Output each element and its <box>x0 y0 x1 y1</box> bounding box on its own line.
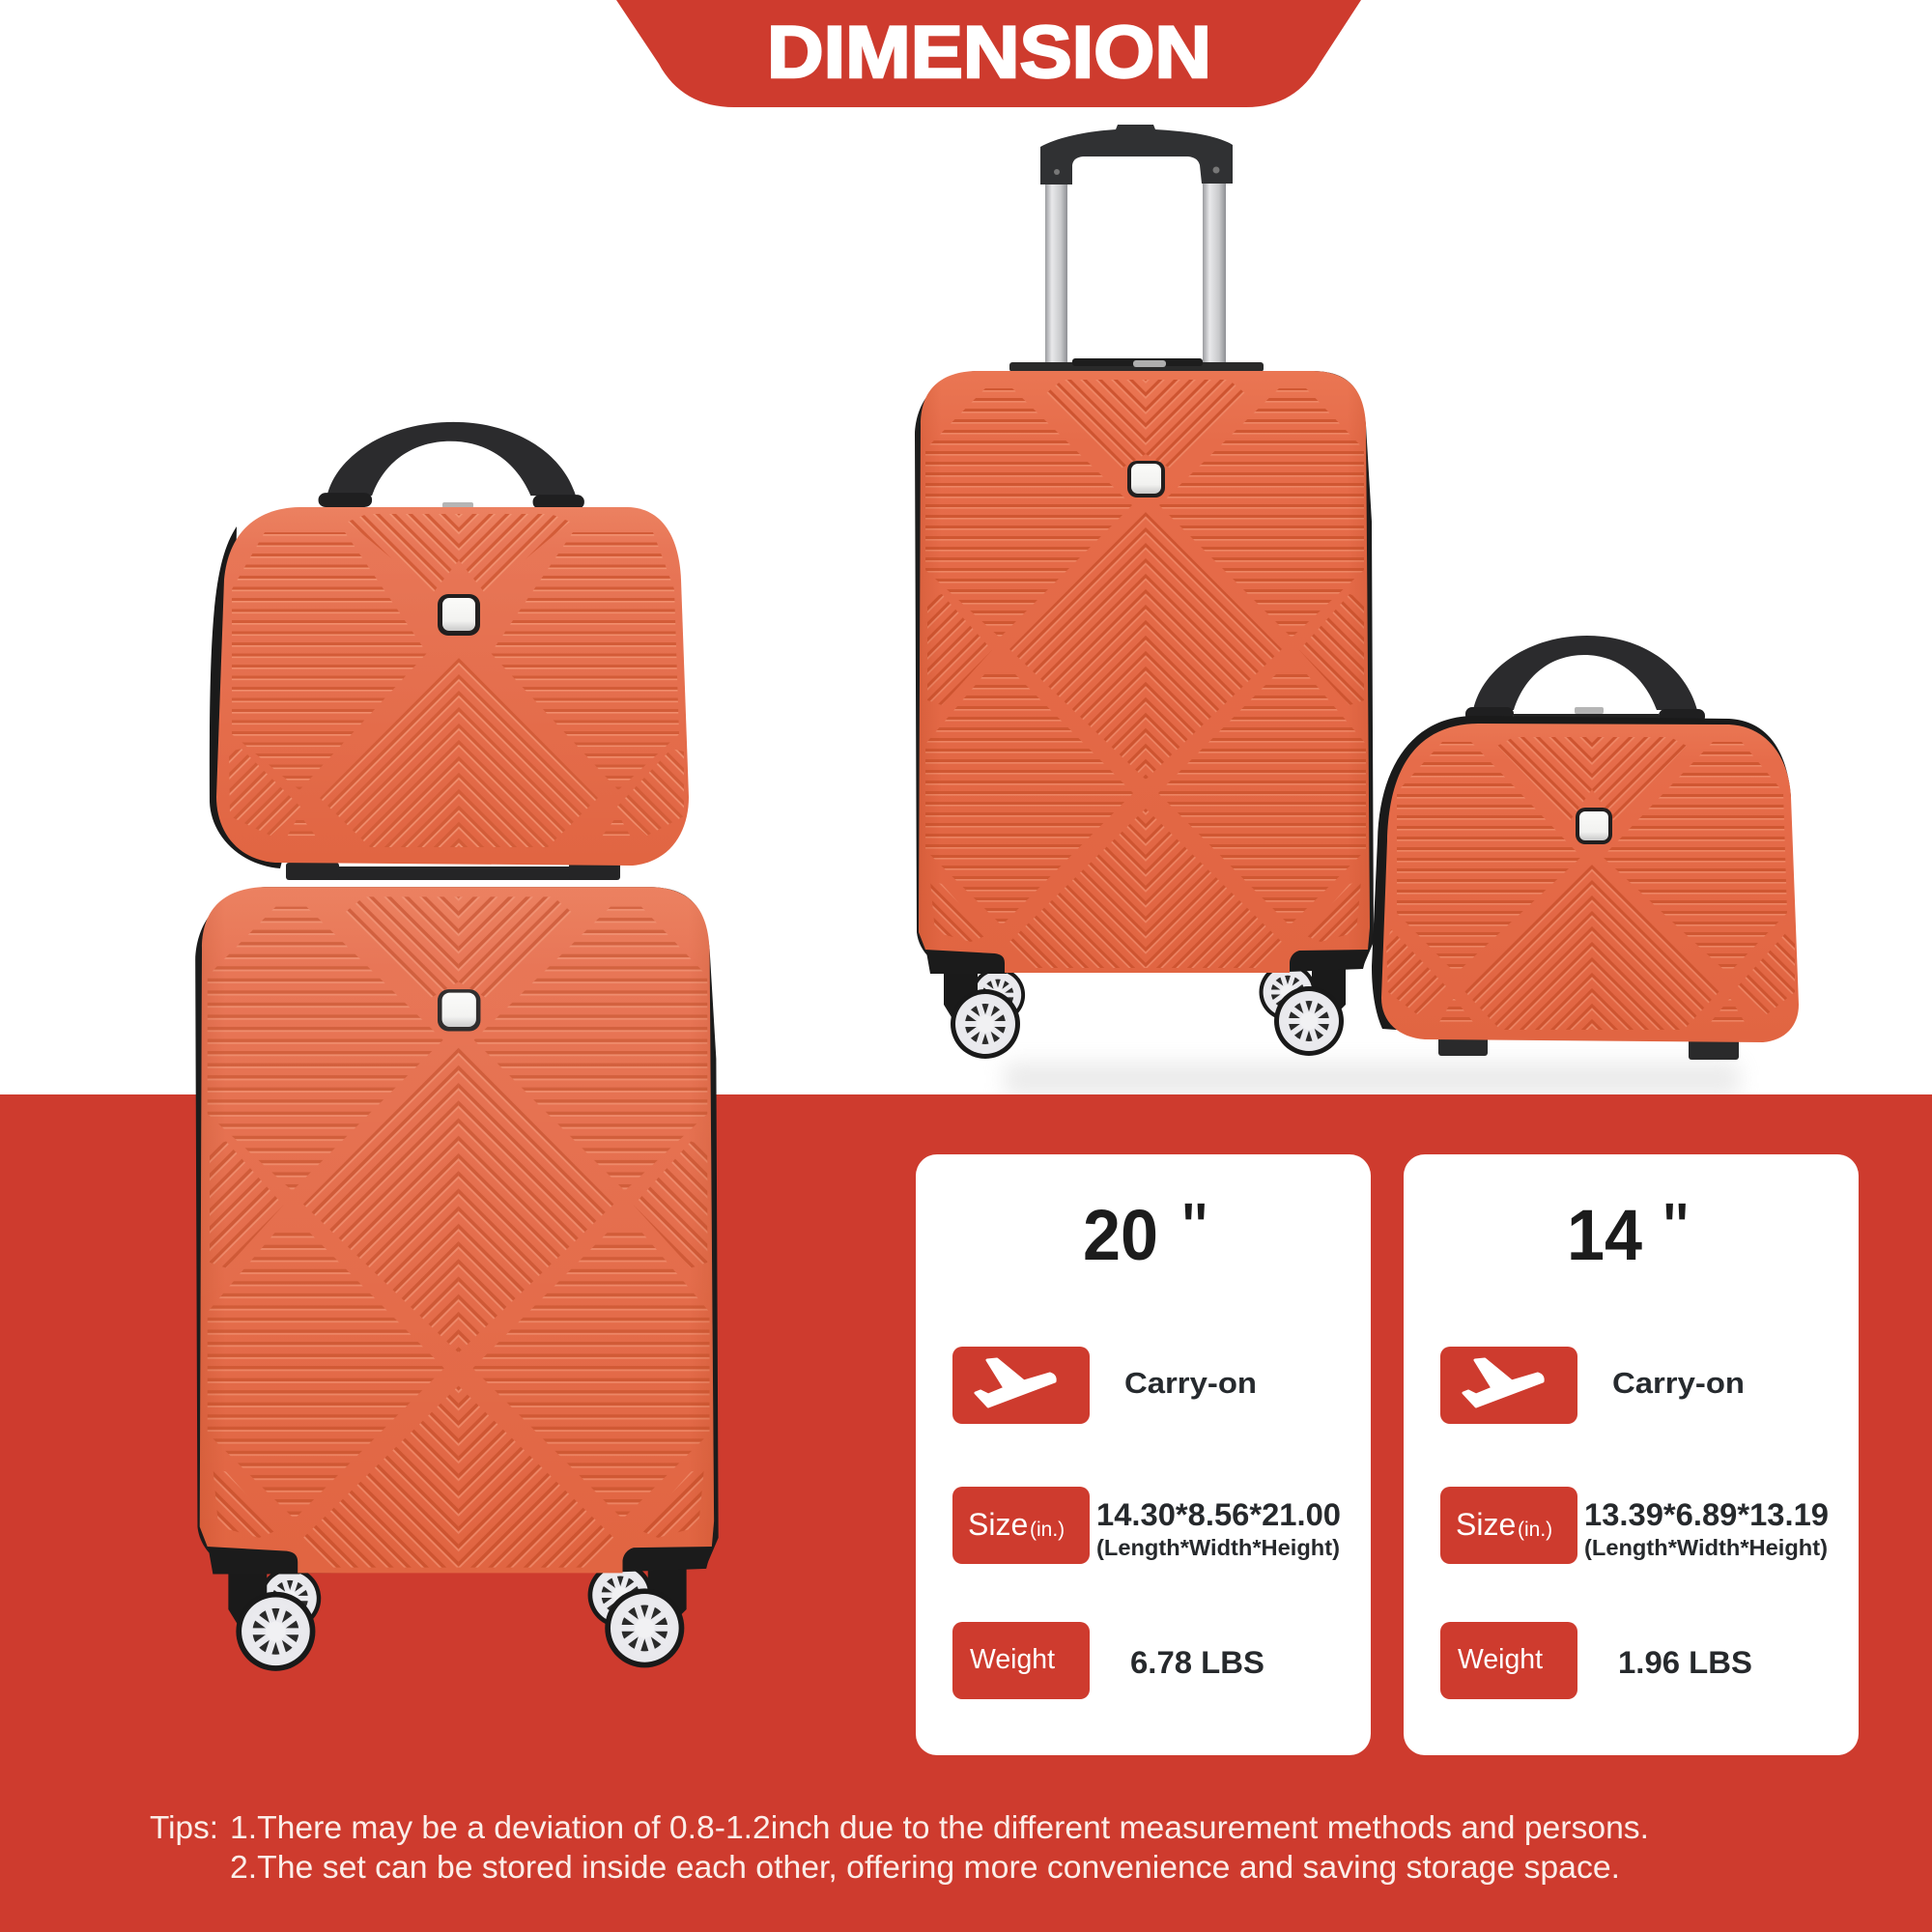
red lower panel <box>0 1094 1932 1932</box>
stacked vanity body <box>216 507 689 866</box>
weight value: 1.96 LBS <box>1618 1645 1752 1680</box>
stacked vanity zipper pull <box>442 502 473 508</box>
stacked vanity badge <box>438 594 480 636</box>
zipper <box>1514 714 1659 721</box>
size chip: Size <box>1456 1507 1516 1542</box>
weight chip: Weight <box>970 1644 1055 1675</box>
photo: 14 inch vanity case <box>1372 636 1799 1060</box>
trolley poles <box>1045 179 1226 365</box>
icon: plane <box>952 1347 1090 1424</box>
stacked vanity rib pattern <box>229 514 684 847</box>
vanity feet <box>1438 1034 1739 1060</box>
size value <box>1584 1497 1829 1560</box>
size chip: Size <box>968 1507 1028 1542</box>
stacked vanity black shell <box>210 526 285 868</box>
tips text block <box>150 1809 1649 1885</box>
carry-on label: Carry-on <box>1124 1366 1257 1400</box>
size chip <box>952 1487 1090 1564</box>
heading banner: DIMENSION <box>616 0 1361 107</box>
zipper pull <box>1575 707 1604 714</box>
tips text block: 1.There may be a deviation of 0.8-1.2inch due to the different measurement methods and persons. <box>230 1809 1649 1845</box>
vanity badge <box>1576 808 1612 844</box>
stacked connector strip and feet <box>286 863 620 880</box>
size heading 14: 14 <box>1567 1195 1642 1275</box>
weight chip: Weight <box>1458 1644 1543 1675</box>
size chip: (in.) <box>1030 1519 1065 1541</box>
vanity rib pattern <box>1386 737 1795 1030</box>
vanity body <box>1381 724 1799 1042</box>
suitcase body <box>915 371 1374 1059</box>
tips text block: Tips: <box>150 1809 218 1845</box>
photo: 20 inch suitcase with trolley handle <box>915 125 1374 1059</box>
trolley grip <box>1040 125 1233 185</box>
inch mark: " <box>1663 1190 1689 1267</box>
tips text block: 2.The set can be stored inside each other, offering more convenience and saving storage space. <box>230 1849 1620 1885</box>
panel: 20 inch specs <box>916 1154 1371 1755</box>
carry-on label: Carry-on <box>1612 1366 1745 1400</box>
weight chip <box>952 1622 1090 1699</box>
size value: (Length*Width*Height) <box>1096 1535 1340 1560</box>
vanity black shell <box>1372 716 1791 1034</box>
stacked 20 inch suitcase <box>195 887 719 1671</box>
size chip <box>1440 1487 1577 1564</box>
top zipper band <box>1009 358 1264 372</box>
weight chip <box>1440 1622 1577 1699</box>
size value: (Length*Width*Height) <box>1584 1535 1828 1560</box>
icon: plane <box>1440 1347 1577 1424</box>
floor shadow <box>1005 1063 1739 1095</box>
panel: 14 inch specs <box>1404 1154 1859 1755</box>
vanity handle <box>1465 636 1705 724</box>
size value: 13.39*6.89*13.19 <box>1584 1497 1829 1532</box>
size value: 14.30*8.56*21.00 <box>1096 1497 1341 1532</box>
inch mark: " <box>1182 1190 1208 1267</box>
size chip: (in.) <box>1518 1519 1552 1541</box>
heading banner: DIMENSION: DIMENSION <box>767 12 1211 94</box>
stacked vanity glow <box>216 507 689 866</box>
weight value: 6.78 LBS <box>1130 1645 1264 1680</box>
stacked vanity handle <box>319 422 584 509</box>
size heading 20: 20 <box>1083 1195 1158 1275</box>
photo: stacked set on the left <box>195 422 719 1671</box>
size value <box>1096 1497 1341 1560</box>
